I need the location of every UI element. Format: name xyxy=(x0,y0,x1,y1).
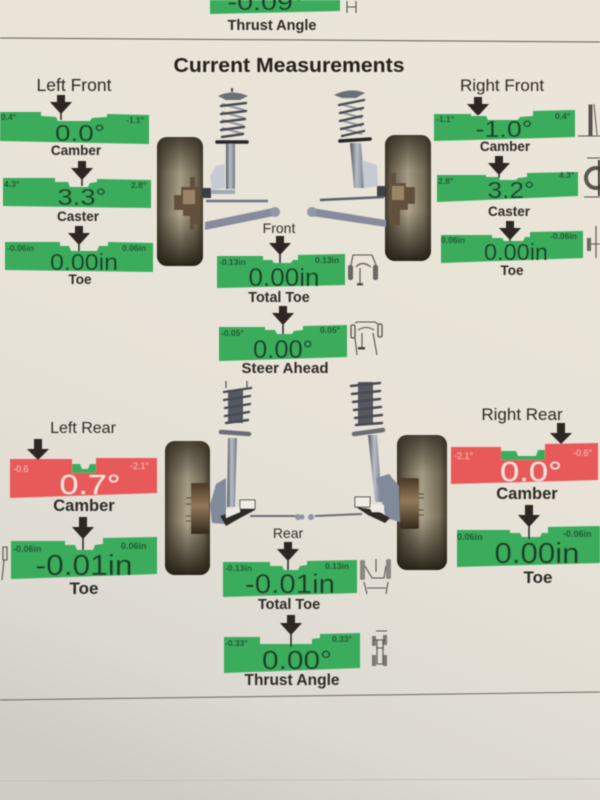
label: toe: Toe xyxy=(68,272,92,287)
gauge: right front toe xyxy=(441,221,583,265)
rear suspension diagram xyxy=(165,381,447,575)
gauge: left rear camber: 0.7° xyxy=(60,469,120,500)
gauge: front total toe xyxy=(217,236,345,292)
gauge: left front toe: -0.06in xyxy=(7,243,34,253)
right rear wheel xyxy=(397,435,447,570)
gauge: rear total toe: 0.13in xyxy=(325,561,349,571)
right rear strut xyxy=(300,382,400,523)
gauge: thrust angle xyxy=(224,615,360,675)
label: total toe: Total Toe xyxy=(258,597,320,613)
gauge: right front caster: 2.8° xyxy=(438,176,454,186)
gauge: right rear camber: -0.6° xyxy=(573,448,593,458)
right front wheel xyxy=(385,135,431,261)
right front strut xyxy=(307,90,386,227)
icon: thrust car xyxy=(372,631,387,666)
gauge: right rear toe xyxy=(457,505,600,570)
gauge: left front camber xyxy=(0,95,149,146)
gauge: left front toe: 0.06in xyxy=(122,243,146,253)
label: toe: Toe xyxy=(500,263,524,278)
previous section: thrust angle fragment: Thrust Angle xyxy=(228,18,316,34)
gauge: right rear toe: -0.06in xyxy=(563,529,592,539)
gauge: right front camber: -1.1° xyxy=(436,114,455,124)
gauge: rear total toe: -0.13in xyxy=(225,563,252,573)
label: toe: Toe xyxy=(524,568,552,587)
gauge: left rear toe: -0.01in xyxy=(36,550,132,582)
left front wheel xyxy=(157,137,203,266)
gauge: steer ahead xyxy=(219,306,347,364)
gauge: right rear toe: 0.06in xyxy=(457,532,483,542)
gauge: left rear camber: -0.6 xyxy=(13,464,29,474)
icon: front toe car xyxy=(348,255,378,286)
label: camber: Camber xyxy=(51,143,102,158)
gauge: front total toe: 0.13in xyxy=(315,255,339,265)
label: steer ahead: Steer Ahead xyxy=(242,360,328,377)
gauge: right rear camber: -2.1° xyxy=(454,451,474,461)
label: rear: Rear xyxy=(273,525,304,541)
label: caster: Caster xyxy=(488,204,531,219)
heading: right rear: Right Rear xyxy=(481,405,563,424)
gauge: left front toe: 0.00in xyxy=(50,249,118,275)
icons: right edge front xyxy=(578,104,600,258)
previous section: thrust angle fragment xyxy=(210,0,356,34)
gauge: left rear toe: 0.06in xyxy=(121,541,147,551)
label: total toe: Total Toe xyxy=(248,290,310,306)
title: Current Measurements xyxy=(174,54,404,77)
gauge: left rear camber xyxy=(10,439,157,500)
label: caster: Caster xyxy=(57,209,100,224)
gauge: right front camber: -1.0° xyxy=(476,116,532,142)
gauge: right front caster: 4.3° xyxy=(559,170,575,180)
heading: left rear: Left Rear xyxy=(50,420,117,437)
panel: right front xyxy=(434,76,583,278)
label: camber: Camber xyxy=(53,497,115,515)
heading: right front: Right Front xyxy=(460,76,544,95)
panel: left rear xyxy=(10,420,157,598)
gauge: left front caster xyxy=(3,161,151,210)
gauge: front total toe: -0.13in xyxy=(219,257,246,267)
gauge: right rear camber xyxy=(451,423,598,487)
gauge: right front camber xyxy=(434,97,575,142)
gauge: right rear camber: 0.0° xyxy=(500,456,562,487)
gauge: right front toe: 0.00in xyxy=(484,239,548,265)
gauge: right front camber: 0.4° xyxy=(555,111,571,121)
gauge: left rear toe: -0.06in xyxy=(13,544,42,554)
left front strut xyxy=(202,88,280,230)
gauge: left front toe xyxy=(5,226,153,275)
gauge: rear total toe: -0.01in xyxy=(245,569,335,599)
gauge: thrust angle: -0.33° xyxy=(225,638,248,648)
gauge: front total toe: 0.00in xyxy=(248,264,320,292)
gauge: left front camber: -1.1° xyxy=(126,115,145,125)
gauge: steer ahead: 0.05° xyxy=(320,325,341,335)
gauge: steer ahead: -0.05° xyxy=(221,328,244,338)
label: camber: Camber xyxy=(496,485,558,503)
heading: left front: Left Front xyxy=(37,75,112,95)
label: thrust angle: Thrust Angle xyxy=(244,672,340,689)
gauge: left front camber: 0.4° xyxy=(1,112,17,122)
label: toe: Toe xyxy=(70,579,98,598)
gauge: left front camber: 0.0° xyxy=(55,120,105,146)
gauge: right front caster: 3.2° xyxy=(488,177,534,203)
left rear strut xyxy=(210,381,301,526)
gauge: steer ahead: 0.00° xyxy=(253,336,313,364)
label: camber: Camber xyxy=(480,139,531,154)
gauge: thrust angle: 0.00° xyxy=(262,645,332,675)
gauge: left rear camber: -2.1° xyxy=(130,461,150,471)
panel: right rear xyxy=(451,405,600,587)
gauge: left front caster: 3.3° xyxy=(58,184,106,210)
gauge: right front caster xyxy=(437,156,578,203)
gauge: right rear toe: 0.00in xyxy=(494,538,580,570)
icon: steer ahead car xyxy=(351,322,382,355)
icon: left edge rear xyxy=(2,547,7,580)
gauge: right front toe: 0.06in xyxy=(441,235,465,245)
icon: rear toe car xyxy=(360,559,391,594)
gauge: left front caster: 4.3° xyxy=(4,179,20,189)
front suspension diagram xyxy=(157,88,431,266)
gauge: thrust angle: 0.33° xyxy=(332,634,353,644)
gauge: left front caster: 2.8° xyxy=(131,180,147,190)
left rear wheel xyxy=(165,441,210,575)
gauge: left rear toe xyxy=(11,517,157,582)
gauge: rear total toe xyxy=(223,542,357,599)
gauge: right front toe: -0.06in xyxy=(550,231,577,241)
label: front: Front xyxy=(263,220,295,236)
panel: left front xyxy=(0,75,153,287)
